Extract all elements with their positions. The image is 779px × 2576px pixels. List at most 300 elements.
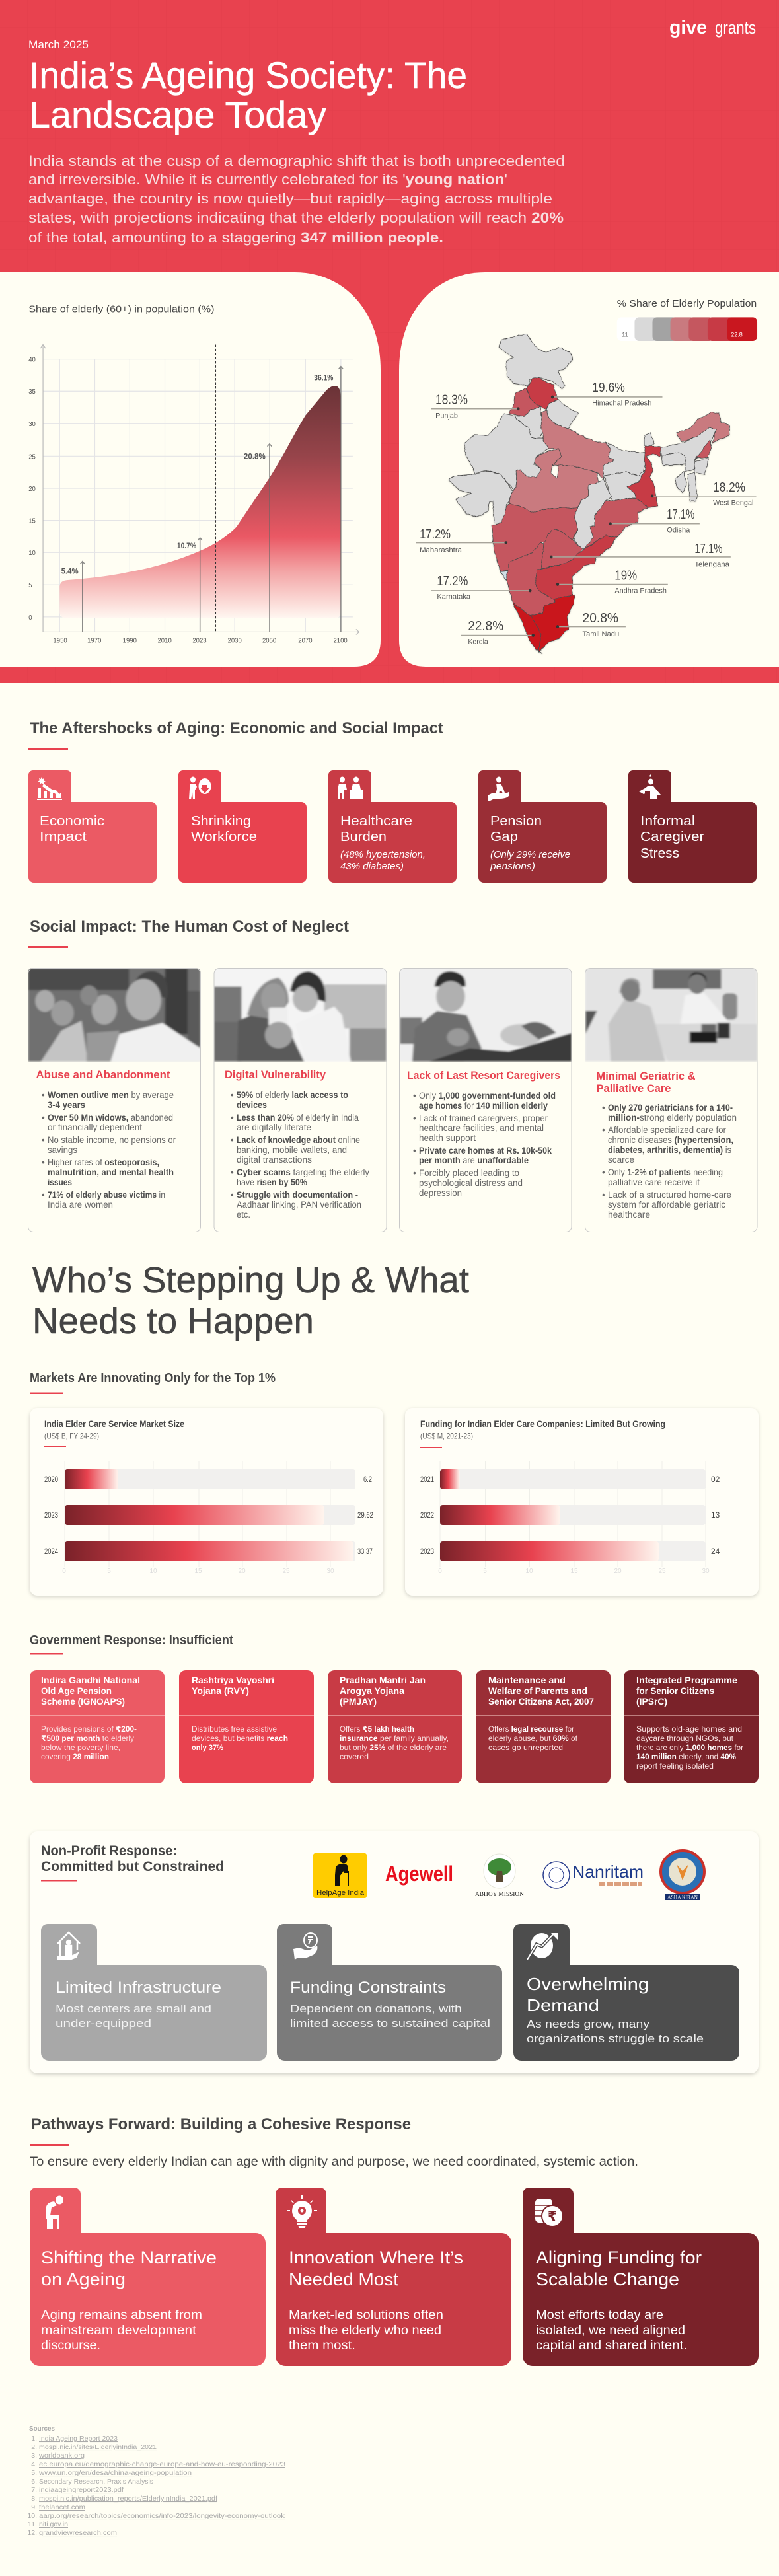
sources list: 8.	[31, 2495, 37, 2503]
card: healthcare burden: Healthcare	[340, 813, 412, 828]
card: funding constraints: Dependent on donations, with	[290, 2003, 462, 2015]
heading: who's stepping up: Needs to Happen	[32, 1300, 314, 1341]
icon: coins with rupee: ₹	[548, 2209, 557, 2224]
map callouts: Karnataka	[437, 593, 470, 601]
panel: elder care market size bar chart: 30	[326, 1568, 334, 1575]
heading: social impact: Social Impact: The Human Cost of Neglect	[30, 918, 349, 936]
card: aligning funding: Most efforts today are	[536, 2308, 663, 2322]
bullet list: malnutrition, and mental health	[48, 1167, 174, 1177]
sources list: 6.	[31, 2478, 37, 2485]
map callouts: 18.3%	[435, 392, 468, 408]
title	[29, 54, 467, 135]
card: overwhelming demand: organizations struggle to scale	[527, 2032, 704, 2045]
card: Maintenance and Welfare Act: Maintenance and	[488, 1675, 566, 1685]
card: limited infrastructure	[41, 1924, 267, 2061]
card: shifting the narrative: on Ageing	[41, 2269, 126, 2289]
card: PMJAY: but only 25% of the elderly are	[340, 1743, 447, 1752]
card: Maintenance and Welfare Act: Welfare of Parents and	[488, 1685, 587, 1696]
bullet list: 59% of elderly lack access to	[237, 1090, 348, 1100]
logo: give grants: give	[669, 17, 707, 38]
x axis labels: 2010	[158, 638, 172, 645]
bullet list: digital transactions	[237, 1155, 312, 1165]
data labels: 20.8%	[244, 453, 266, 461]
y axis labels: 40	[28, 356, 36, 364]
panel: non-profit response	[30, 1831, 759, 2073]
value arrows	[80, 367, 343, 632]
card: IPSrC: (IPSrC)	[636, 1696, 667, 1707]
bullet list: •	[42, 1090, 45, 1100]
panel: elder care market size bar chart: 15	[194, 1568, 202, 1575]
icon: coins with rupee	[535, 2199, 563, 2226]
bullet list: psychological distress and	[419, 1178, 523, 1188]
heading: pathways forward	[30, 2116, 411, 2146]
card: IPSrC	[624, 1670, 759, 1783]
bullet list: Forcibly placed leading to	[419, 1168, 519, 1178]
card: PMJAY: (PMJAY)	[340, 1696, 377, 1707]
card: economic impact: Impact	[40, 829, 87, 844]
heading: Non-Profit Response:	[41, 1843, 177, 1858]
sources list: thelancet.com	[39, 2503, 85, 2511]
card: informal caregiver stress: Informal	[640, 813, 695, 828]
card: pension gap	[478, 770, 607, 883]
card: healthcare burden: (48% hypertension,	[340, 849, 426, 860]
panel: elder care market size bar chart: (US$ B, FY 24-29)	[44, 1431, 99, 1440]
card: funding constraints	[277, 1924, 502, 2061]
card: pension gap: Gap	[490, 829, 518, 844]
card: shifting the narrative: Shifting the Narrative	[41, 2248, 217, 2267]
card: aligning funding: Aligning Funding for	[536, 2248, 702, 2267]
panel: elder care market size bar chart	[30, 1408, 383, 1596]
legend scale: 22.8	[731, 331, 743, 338]
area curve	[59, 386, 341, 618]
axes	[40, 345, 359, 634]
card: IPSrC: report feeling isolated	[636, 1761, 714, 1771]
heading: who's stepping up	[32, 1259, 469, 1341]
card: Maintenance and Welfare Act: Offers legal recourse for	[488, 1724, 574, 1734]
y axis labels: 35	[28, 388, 36, 396]
card: aligning funding	[523, 2188, 759, 2366]
bullet list: •	[413, 1091, 416, 1101]
heading: Committed but Constrained	[41, 1859, 224, 1874]
legend scale: 11	[622, 331, 628, 338]
card: Maintenance and Welfare Act	[476, 1670, 611, 1783]
card: overwhelming demand: As needs grow, many	[527, 2018, 650, 2030]
card: economic impact: Economic	[40, 813, 104, 828]
sources list: Sources	[29, 2425, 55, 2433]
bullet list: •	[42, 1158, 45, 1167]
panel: minimal geriatric and palliative care: Palliative Care	[596, 1082, 671, 1095]
heading: who's stepping up: Who’s Stepping Up & What	[32, 1259, 469, 1300]
card: IPSrC: Integrated Programme	[636, 1675, 737, 1685]
bullet list: healthcare	[608, 1210, 650, 1220]
bullet list: Only 1,000 government-funded old	[419, 1091, 556, 1101]
bullet list: •	[42, 1135, 45, 1145]
card: IGNOAPS: Provides pensions of ₹200-	[41, 1724, 137, 1734]
date: March 2025	[28, 38, 89, 51]
heading: markets: Markets Are Innovating Only for the Top 1%	[30, 1371, 276, 1385]
bullet list: •	[231, 1190, 234, 1200]
card: Maintenance and Welfare Act: elderly abuse, but 60% of	[488, 1734, 578, 1743]
card: IGNOAPS: covering 28 million	[41, 1752, 109, 1761]
icon: house with person in hand	[57, 1932, 80, 1960]
y axis labels: 10	[28, 550, 36, 557]
panel: elder care funding bar chart: 5	[483, 1568, 487, 1575]
panel: minimal geriatric and palliative care: Minimal Geriatric &	[596, 1070, 695, 1082]
sources list: grandviewresearch.com	[39, 2529, 117, 2537]
bullet list: Lack of a structured home-care	[608, 1190, 731, 1200]
photo: nurse and patient	[399, 968, 572, 1062]
panel: India map of elderly share	[399, 272, 779, 667]
legend title: % Share of Elderly Population	[617, 299, 757, 309]
panel: elder care market size bar chart: 20	[238, 1568, 246, 1575]
sources list: India Ageing Report 2023	[39, 2435, 118, 2443]
bullet list: per month are unaffordable	[419, 1156, 529, 1165]
bullet list: •	[413, 1168, 416, 1178]
bullet list: depression	[419, 1188, 462, 1198]
card: IGNOAPS	[30, 1670, 165, 1783]
pathways intro line: To ensure every elderly Indian can age with dignity and purpose, we need coordinated, systemic action.	[30, 2155, 638, 2169]
photo: doctor checking blood pressure	[585, 968, 757, 1062]
card: IGNOAPS: Indira Gandhi National	[41, 1675, 140, 1685]
card: shrinking workforce: Workforce	[191, 829, 257, 844]
y axis labels: 5	[28, 582, 32, 589]
bullet list: Higher rates of osteoporosis,	[48, 1158, 159, 1167]
card: innovation: Market-led solutions often	[289, 2308, 443, 2322]
card: healthcare burden: 43% diabetes)	[340, 861, 404, 872]
y axis labels: 0	[28, 614, 32, 622]
bullet list: banking, mobile wallets, and	[237, 1145, 347, 1155]
map callouts: Kerela	[468, 638, 488, 646]
India map states	[448, 334, 730, 653]
card: healthcare burden: Burden	[340, 829, 387, 844]
logo: Nanritam	[543, 1862, 644, 1888]
sources list: niti.gov.in	[39, 2521, 68, 2528]
x axis labels: 2100	[333, 638, 348, 645]
card: shifting the narrative	[30, 2188, 266, 2366]
card: overwhelming demand	[513, 1924, 739, 2061]
bullet list: million-strong elderly population	[608, 1113, 737, 1122]
card: innovation: Innovation Where It’s	[289, 2248, 463, 2267]
card: limited infrastructure: under-equipped	[56, 2017, 151, 2030]
card: RVY: Yojana (RVY)	[192, 1685, 249, 1696]
logo: give grants	[669, 17, 756, 38]
sources list: indiaageingreport2023.pdf	[39, 2486, 124, 2494]
panel: abuse and abandonment: Abuse and Abandonment	[36, 1068, 170, 1081]
photo: elderly women	[28, 968, 201, 1062]
intro paragraph: states, with projections indicating that the elderly population will reach 20%	[28, 209, 564, 226]
bullet list: have risen by 50%	[237, 1177, 307, 1187]
sources list: worldbank.org	[38, 2452, 85, 2460]
panel: minimal geriatric and palliative care	[585, 968, 757, 1232]
bullet list: Aadhaar linking, PAN verification	[237, 1200, 361, 1210]
bullet list: •	[231, 1167, 234, 1177]
heading: government response: Government Response: Insufficient	[30, 1633, 233, 1648]
map callouts	[416, 381, 757, 646]
sources list: aarp.org/research/topics/economics/info-2023/longevity-economy-outlook	[39, 2512, 285, 2520]
bullet list: Women outlive men by average	[48, 1090, 174, 1100]
panel: elder care funding bar chart: (US$ M, 2021-23)	[420, 1431, 473, 1440]
bullet list: •	[231, 1135, 234, 1145]
card: IGNOAPS: below the poverty line,	[41, 1743, 120, 1752]
card: overwhelming demand: Overwhelming	[527, 1974, 649, 1994]
bullet list: Private care homes at Rs. 10k-50k	[419, 1146, 552, 1156]
panel: elder care funding bar chart: 2021	[420, 1475, 434, 1484]
map callouts: 20.8%	[583, 610, 618, 626]
card: shrinking workforce: Shrinking	[191, 813, 251, 828]
sources list: 2.	[31, 2443, 37, 2451]
bullet list: 71% of elderly abuse victims in	[48, 1190, 165, 1200]
card: PMJAY: Pradhan Mantri Jan	[340, 1675, 426, 1685]
panel: elder care funding bar chart	[405, 1408, 759, 1596]
bullet list	[602, 1103, 737, 1220]
sources list: 12.	[27, 2529, 37, 2537]
map callouts: Telengana	[694, 561, 729, 569]
sources list: ec.europa.eu/demographic-change-europe-and-how-eu-responding-2023	[39, 2460, 285, 2468]
y axis labels	[28, 356, 36, 622]
card: innovation	[276, 2188, 511, 2366]
panel: elder care funding bar chart: 13	[711, 1510, 720, 1520]
card: shifting the narrative: mainstream development	[41, 2324, 197, 2337]
bullet list: Lack of knowledge about online	[237, 1135, 360, 1145]
bullet list: Lack of trained caregivers, proper	[419, 1113, 548, 1123]
x axis labels: 2030	[228, 638, 242, 645]
card: healthcare burden	[328, 770, 457, 883]
card: pension gap: (Only 29% receive	[490, 849, 570, 860]
sources list: mospi.nic.in/sites/ElderlyinIndia_2021	[39, 2443, 157, 2451]
panel: elderly share area chart	[0, 272, 381, 667]
intro paragraph: and irreversible. While it is currently celebrated for its ' young nation '	[28, 171, 507, 188]
x axis labels: 1970	[87, 638, 102, 645]
card: economic impact	[28, 770, 157, 883]
card: PMJAY: insurance per family annually,	[340, 1734, 449, 1743]
card: informal caregiver stress	[628, 770, 757, 883]
bullet list: •	[413, 1146, 416, 1156]
card: innovation: Needed Most	[289, 2269, 399, 2289]
map callouts: 17.1%	[694, 542, 723, 556]
hero header band	[0, 0, 779, 683]
map callouts: 17.2%	[437, 574, 468, 589]
icon: seated elder	[46, 2196, 63, 2232]
panel: elder care funding bar chart: 2022	[420, 1510, 434, 1520]
intro paragraph: of the total, amounting to a staggering 347 million people.	[28, 229, 443, 246]
panel: elder care market size bar chart: 25	[282, 1568, 290, 1575]
card: IGNOAPS: Old Age Pension	[41, 1685, 112, 1696]
panel: elder care market size bar chart: 2020	[44, 1475, 58, 1484]
card: aligning funding: isolated, we need aligned	[536, 2324, 685, 2337]
heading: aftershocks: The Aftershocks of Aging: Economic and Social Impact	[30, 719, 443, 737]
sources list: 9.	[31, 2503, 37, 2511]
bullet list: •	[413, 1113, 416, 1123]
card: shifting the narrative: Aging remains absent from	[41, 2308, 202, 2322]
card: shrinking workforce	[178, 770, 307, 883]
sources list: 7.	[31, 2486, 37, 2494]
bullet list: •	[231, 1113, 234, 1122]
panel: elder care market size bar chart: 2024	[44, 1547, 58, 1556]
bullet list: 3-4 years	[48, 1100, 85, 1110]
map callouts: West Bengal	[713, 499, 753, 507]
panel: lack of last resort caregivers	[399, 968, 572, 1232]
logo: Agewell: Agewell	[385, 1862, 453, 1886]
bullet list: •	[231, 1090, 234, 1100]
card: Maintenance and Welfare Act: cases go unreported	[488, 1743, 563, 1752]
logo: Abhoy Mission	[475, 1854, 524, 1898]
card: Maintenance and Welfare Act: Senior Citizens Act, 2007	[488, 1696, 594, 1707]
card: limited infrastructure: Most centers are small and	[56, 2003, 211, 2015]
panel: elder care funding bar chart: 10	[525, 1568, 533, 1575]
logo: Asha Kiran: ASHA KIRAN	[667, 1895, 698, 1900]
sources list: 5.	[31, 2469, 37, 2477]
sources list: www.un.org/en/desa/china-ageing-population	[38, 2469, 192, 2477]
sources list	[27, 2425, 285, 2537]
bullet list: •	[42, 1113, 45, 1122]
card: informal caregiver stress: Stress	[640, 846, 679, 861]
intro paragraph: India stands at the cusp of a demographic shift that is both unprecedented	[28, 153, 565, 169]
data labels: 10.7%	[177, 542, 197, 550]
panel: elder care funding bar chart: 02	[711, 1475, 720, 1484]
bullet list: Cyber scams targeting the elderly	[237, 1167, 369, 1177]
bullet list: savings	[48, 1145, 77, 1155]
bullet list: •	[42, 1190, 45, 1200]
map callouts: Himachal Pradesh	[592, 400, 652, 408]
heading: social impact	[28, 918, 349, 948]
card: IPSrC: 140 million elderly, and 40%	[636, 1752, 736, 1761]
card: informal caregiver stress: Caregiver	[640, 829, 704, 844]
data labels: 36.1%	[314, 374, 334, 383]
panel: elder care funding bar chart: 0	[438, 1568, 442, 1575]
bullet list: diabetes, arthritis, dementia) is	[608, 1145, 731, 1155]
title: Landscape Today	[29, 94, 326, 135]
panel: elder care funding bar chart: 25	[658, 1568, 666, 1575]
card: PMJAY	[328, 1670, 462, 1783]
intro paragraph	[28, 153, 565, 246]
x axis labels: 2023	[192, 638, 207, 645]
heading: pathways forward: Pathways Forward: Building a Cohesive Response	[31, 2116, 411, 2133]
heading: aftershocks	[28, 719, 443, 750]
panel: lack of last resort caregivers: Lack of Last Resort Caregivers	[407, 1069, 560, 1082]
card: innovation: miss the elderly who need	[289, 2324, 441, 2337]
photo: grandmother and girl with phone	[213, 968, 387, 1062]
logo: HelpAge India	[313, 1853, 367, 1898]
bullet list: •	[602, 1190, 605, 1200]
x axis labels: 2070	[298, 638, 313, 645]
map callouts: 22.8%	[468, 619, 503, 634]
panel: elder care funding bar chart: 24	[711, 1547, 720, 1556]
card: RVY	[179, 1670, 314, 1783]
card: IGNOAPS: Scheme (IGNOAPS)	[41, 1696, 125, 1707]
panel: abuse and abandonment	[28, 968, 201, 1232]
card: aligning funding: Scalable Change	[536, 2269, 679, 2289]
map callouts: Odisha	[667, 527, 690, 534]
x axis labels: 1990	[123, 638, 137, 645]
icon: doctor and patient	[338, 777, 363, 799]
forecast divider	[215, 345, 217, 632]
card: overwhelming demand: Demand	[527, 1995, 599, 2015]
card: PMJAY: Arogya Yojana	[340, 1685, 404, 1696]
logo: Nanritam: Nanritam	[572, 1862, 644, 1882]
bullet list: No stable income, no pensions or	[48, 1135, 176, 1145]
bullet list: Less than 20% of elderly in India	[237, 1113, 359, 1122]
card: PMJAY: Offers ₹5 lakh health	[340, 1724, 414, 1734]
map callouts: Tamil Nadu	[583, 631, 619, 638]
x axis labels	[53, 638, 348, 645]
bullet list	[413, 1091, 556, 1198]
card: pension gap: Pension	[490, 813, 542, 828]
y axis labels: 15	[28, 517, 36, 525]
panel: elder care market size bar chart: 10	[149, 1568, 157, 1575]
icon: caregiver	[639, 774, 661, 799]
panel: digital vulnerability	[213, 968, 387, 1232]
bullet list: Only 1-2% of patients needing	[608, 1167, 723, 1177]
y axis labels: 20	[28, 486, 36, 493]
sources list: Secondary Research, Praxis Analysis	[39, 2478, 153, 2485]
panel: elder care market size bar chart: 6.2	[363, 1475, 372, 1484]
logo: HelpAge India: HelpAge India	[316, 1889, 365, 1897]
icon: elder on a hand	[488, 777, 509, 801]
card: funding constraints: limited access to sustained capital	[290, 2017, 490, 2030]
bullet list: India are women	[48, 1200, 113, 1210]
icon: coin in hand	[293, 1933, 317, 1960]
panel: elder care market size bar chart: 33.37	[357, 1547, 373, 1556]
heading	[41, 1843, 224, 1882]
y axis labels: 30	[28, 421, 36, 428]
card: innovation: them most.	[289, 2339, 355, 2353]
card: IPSrC: Supports old-age homes and	[636, 1724, 742, 1734]
bullet list: •	[602, 1167, 605, 1177]
card: RVY: Rashtriya Vayoshri	[192, 1675, 274, 1685]
card: RVY: only 37%	[192, 1743, 223, 1752]
sources list: 1.	[31, 2435, 37, 2443]
bullet list: system for affordable geriatric	[608, 1200, 725, 1210]
panel: elder care market size bar chart: 5	[107, 1568, 111, 1575]
bullet list: Only 270 geriatricians for a 140-	[608, 1103, 733, 1113]
map callouts: Andhra Pradesh	[614, 587, 667, 595]
bullet list: •	[602, 1103, 605, 1113]
icon: falling bar chart	[37, 777, 62, 800]
map callouts: Maharashtra	[420, 547, 462, 554]
card: IPSrC: daycare through NGOs, but	[636, 1734, 734, 1743]
logo: Asha Kiran	[661, 1851, 704, 1900]
map callouts: 17.1%	[667, 507, 694, 522]
bullet list: palliative care receive it	[608, 1177, 700, 1187]
panel: digital vulnerability: Digital Vulnerability	[225, 1068, 326, 1081]
chart title: Share of elderly (60+) in population (%)	[28, 304, 215, 315]
card: RVY: devices, but benefits reach	[192, 1734, 288, 1743]
y axis labels: 25	[28, 453, 36, 460]
card: aligning funding: capital and shared intent.	[536, 2339, 687, 2353]
icon: rising arrow over globe	[527, 1933, 558, 1960]
icon: worker with globe	[189, 777, 211, 799]
card: IPSrC: there are only 1,000 homes for	[636, 1743, 743, 1752]
bullet list	[42, 1090, 176, 1210]
bullet list: chronic diseases (hypertension,	[608, 1135, 733, 1145]
card: funding constraints: Funding Constraints	[290, 1979, 446, 1997]
title: India’s Ageing Society: The	[29, 54, 467, 96]
card: pension gap: pensions)	[490, 861, 535, 872]
bullet list: issues	[48, 1177, 72, 1187]
x axis labels: 1950	[53, 638, 67, 645]
sources list: 4.	[31, 2460, 37, 2468]
logo: give grants: grants	[715, 18, 756, 38]
bullet list: scarce	[608, 1155, 634, 1165]
panel: elder care funding bar chart: 30	[702, 1568, 710, 1575]
map callouts: 17.2%	[420, 527, 451, 542]
bullet list: •	[602, 1125, 605, 1135]
panel: elder care funding bar chart: 20	[614, 1568, 622, 1575]
panel: elder care market size bar chart: 29.62	[357, 1510, 373, 1520]
map callouts: 19%	[614, 568, 637, 583]
card: IPSrC: for Senior Citizens	[636, 1685, 714, 1696]
card: PMJAY: covered	[340, 1752, 369, 1761]
